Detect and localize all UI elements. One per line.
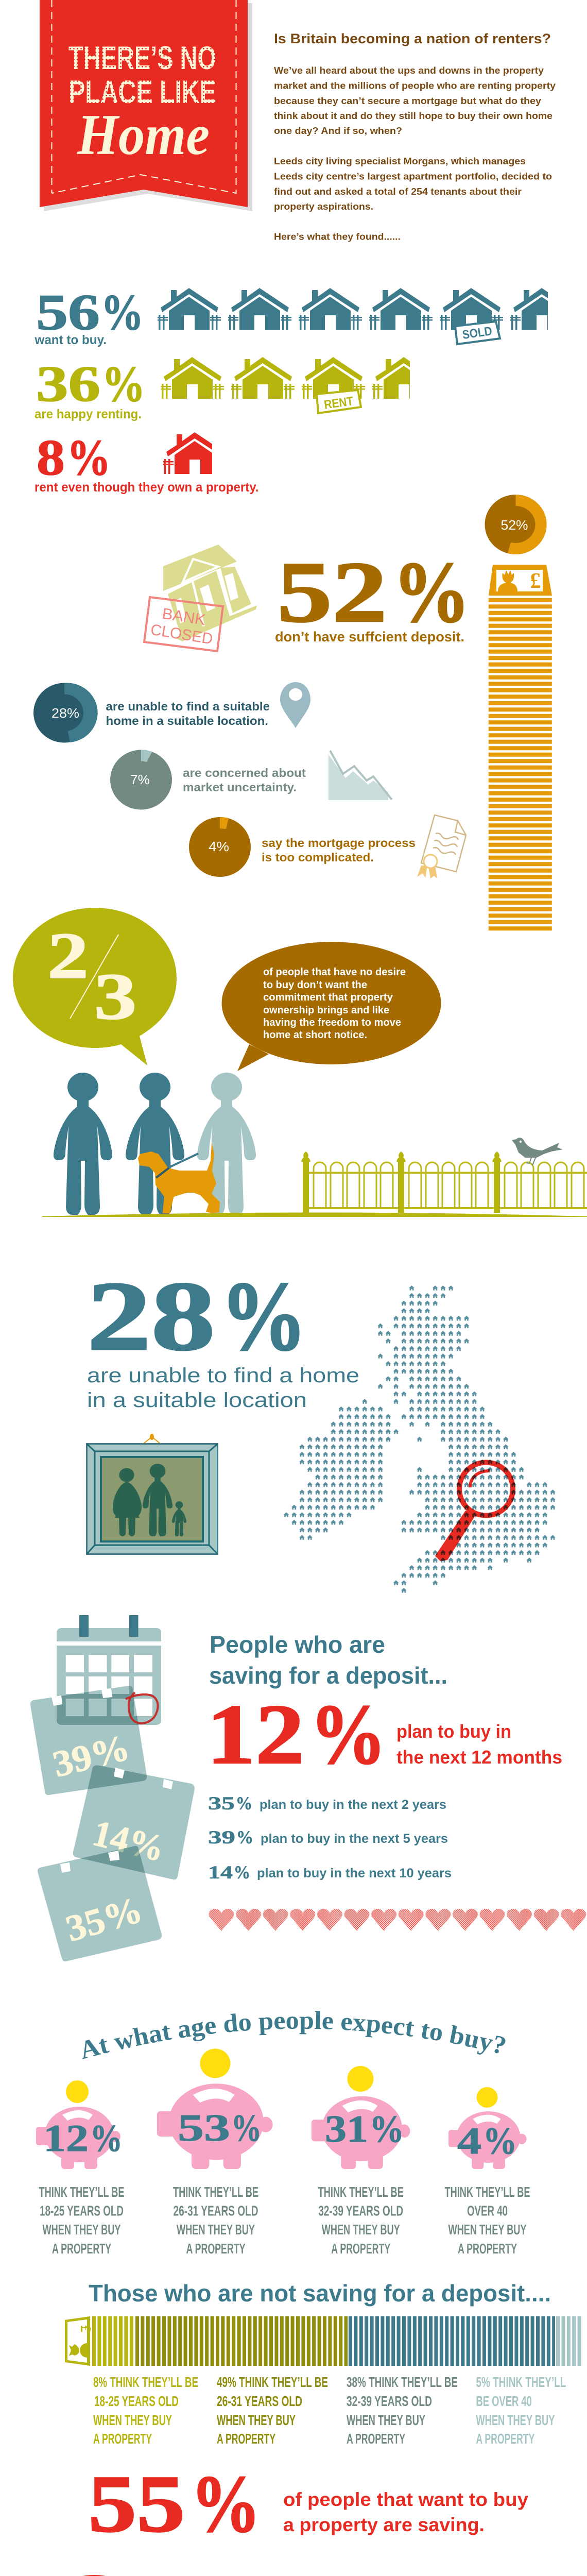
callout: two thirds bubble: 2 xyxy=(47,919,89,992)
title: Home script: Home xyxy=(77,103,210,167)
stat: 28% no suitable home: % xyxy=(220,1261,307,1371)
illustration: dog on lead xyxy=(138,1142,220,1213)
list: other saving plans: 14 xyxy=(208,1862,233,1883)
icon row: teal houses xyxy=(158,288,574,344)
labels: expected buying age: A PROPERTY xyxy=(331,2241,390,2257)
callout: no desire to buy bubble: ownership brings and like xyxy=(263,1005,389,1016)
labels: non-savers column 4: A PROPERTY xyxy=(476,2431,535,2447)
icon: certificate xyxy=(417,815,466,878)
decoration: cross-stitch hearts xyxy=(209,1909,587,1931)
piggy bank: 31%: 31 xyxy=(325,2108,368,2150)
icon: banknote end: £ xyxy=(77,2325,93,2332)
labels: expected buying age: 18-25 YEARS OLD xyxy=(40,2203,124,2218)
callout: no desire to buy bubble: home at short notice. xyxy=(263,1029,367,1041)
stat: 55% are saving: % xyxy=(191,2459,261,2549)
chart: 7% donut: 7% xyxy=(130,772,150,787)
stamp: bank closed: CLOSED xyxy=(149,621,214,648)
stat: 8% rent even though they own: % xyxy=(67,430,111,486)
piggy bank: 53%: 53 xyxy=(178,2107,230,2149)
illustration: framed family picture xyxy=(87,1434,217,1554)
title: There's no place like: PLACE LIKE xyxy=(68,74,216,110)
stat: 36% are happy renting: % xyxy=(102,356,145,412)
illustration: three people xyxy=(54,1073,256,1215)
illustration: ground xyxy=(42,1213,587,1217)
calendar page: 35% xyxy=(38,1846,162,1961)
labels: expected buying age: A PROPERTY xyxy=(52,2241,111,2257)
chart: 52% donut: 52% xyxy=(500,517,528,533)
text block: introduction: because they can’t secure a mortgage but what do they xyxy=(274,96,541,106)
heading: people saving for deposit xyxy=(209,1631,447,1689)
icon: rent sign: RENT xyxy=(323,394,354,412)
callout: no desire to buy bubble: to buy don’t want the xyxy=(263,979,367,991)
calendar page: 39%: 39% xyxy=(49,1726,133,1785)
labels: expected buying age: THINK THEY’LL BE xyxy=(318,2184,404,2200)
callout: no desire to buy bubble: commitment that property xyxy=(263,992,393,1003)
stat: 36% are happy renting xyxy=(34,356,436,421)
labels: non-savers column 2: 49% THINK THEY’LL BE xyxy=(217,2374,328,2390)
list: other saving plans: plan to buy in the next 2 years xyxy=(260,1798,446,1812)
labels: non-savers column 3: 38% THINK THEY’LL BE xyxy=(347,2374,458,2390)
piggy bank: 53%: % xyxy=(231,2107,262,2149)
list: other saving plans: % xyxy=(236,1827,253,1848)
illustration: iron fence xyxy=(301,1151,587,1213)
list: other saving plans: plan to buy in the next 10 years xyxy=(257,1866,452,1880)
text block: introduction: think about it and do they still hope to buy their own home xyxy=(274,111,553,121)
icon: closed bank xyxy=(163,545,257,641)
icon: banknote end xyxy=(65,2316,93,2366)
list: other saving plans: % xyxy=(236,1793,252,1814)
stat: 52% no deposit: % xyxy=(393,544,470,640)
icon: banknote stack: £ xyxy=(530,569,541,593)
labels: non-savers column 1: A PROPERTY xyxy=(93,2431,152,2447)
chart: 4% donut: 4% xyxy=(209,839,229,854)
text block: introduction: market and the millions of people who are renting property xyxy=(274,80,556,91)
labels: expected buying age: WHEN THEY BUY xyxy=(177,2222,255,2238)
labels: expected buying age: A PROPERTY xyxy=(458,2241,517,2257)
stat: 52% no deposit: 52 xyxy=(277,544,387,640)
heading: people saving for deposit: saving for a deposit... xyxy=(209,1662,447,1689)
icon: map pin xyxy=(280,682,310,728)
text: concerned about market uncertainty: market uncertainty. xyxy=(183,781,297,794)
labels: non-savers column 1: 18-25 YEARS OLD xyxy=(94,2393,179,2409)
labels: expected buying age: WHEN THEY BUY xyxy=(448,2222,527,2238)
icon: falling chart xyxy=(329,751,392,800)
text: unable to find suitable home xyxy=(106,700,270,727)
callout: two thirds bubble: 3 xyxy=(94,960,137,1033)
labels: expected buying age: THINK THEY’LL BE xyxy=(445,2184,530,2200)
text: mortgage process: is too complicated. xyxy=(262,851,374,864)
stat: 12% next 12 months: the next 12 months xyxy=(396,1747,562,1768)
mark: red circled date xyxy=(126,1692,158,1723)
labels: expected buying age: OVER 40 xyxy=(467,2203,508,2218)
stat: 55% are saving: 55 xyxy=(88,2459,185,2549)
piggy bank: 4%: 4 xyxy=(457,2120,481,2162)
labels: non-savers column 2: WHEN THEY BUY xyxy=(217,2412,296,2428)
stat: 55% are saving: a property are saving. xyxy=(283,2514,485,2535)
icon: red house xyxy=(163,432,212,474)
stat: 55% are saving: of people that want to buy xyxy=(283,2489,528,2510)
labels: non-savers column 4 xyxy=(476,2374,566,2447)
text: unable to find suitable home: home in a suitable location. xyxy=(106,714,268,727)
heading: at what age: At what age do people expect to buy? xyxy=(82,2011,506,2059)
text block: introduction: one day? And if so, when? xyxy=(274,126,402,136)
list: other saving plans: plan to buy in the next 5 years xyxy=(261,1832,448,1846)
text block: introduction: property aspirations. xyxy=(274,201,373,212)
text block: introduction: We’ve all heard about the ups and downs in the property xyxy=(274,65,544,76)
callout: two thirds bubble xyxy=(13,908,177,1065)
labels: non-savers column 2 xyxy=(217,2374,328,2447)
text: concerned about market uncertainty: are concerned about xyxy=(183,766,306,779)
chart: banknote stripe bar xyxy=(65,2316,582,2366)
stat: 8% rent even though they own xyxy=(34,430,258,495)
text block: introduction: Leeds city centre’s largest apartment portfolio, decided to xyxy=(274,171,552,181)
labels: expected buying age: 26-31 YEARS OLD xyxy=(173,2203,258,2218)
stat: 36% are happy renting: 36 xyxy=(36,356,100,412)
stat: 56% want to buy: % xyxy=(101,284,144,341)
stat: 28% no suitable home: are unable to find a home xyxy=(87,1364,359,1387)
labels: non-savers column 2: A PROPERTY xyxy=(217,2431,275,2447)
text: concerned about market uncertainty xyxy=(183,766,306,794)
labels: non-savers column 3 xyxy=(347,2374,458,2447)
heading: people saving for deposit: People who are xyxy=(210,1631,385,1658)
heading: intro question: Is Britain becoming a nation of renters? xyxy=(274,31,551,46)
chart: 28% donut: 28% xyxy=(51,705,79,721)
icon: sold sign xyxy=(455,321,500,344)
list: other saving plans xyxy=(208,1793,452,1883)
labels: non-savers column 2: 26-31 YEARS OLD xyxy=(217,2393,302,2409)
labels: expected buying age: 32-39 YEARS OLD xyxy=(318,2203,403,2218)
stat: 56% want to buy xyxy=(35,288,548,347)
icon: banknote stack xyxy=(489,565,552,931)
piggy bank: 12%: % xyxy=(90,2117,123,2160)
calendar page: 35%: 35% xyxy=(61,1889,147,1950)
labels: expected buying age: THINK THEY’LL BE xyxy=(39,2184,125,2200)
piggy bank: 12%: 12 xyxy=(43,2117,89,2160)
piggy bank: 31%: % xyxy=(370,2108,404,2150)
calendar page: 14%: 14% xyxy=(89,1812,169,1870)
labels: non-savers column 1: WHEN THEY BUY xyxy=(93,2412,172,2428)
stat: 8% rent even though they own: rent even though they own a property. xyxy=(34,480,258,495)
labels: expected buying age xyxy=(39,2184,530,2257)
calendar: pages and planner xyxy=(30,1615,195,1961)
stat: 8% rent even though they own: 8 xyxy=(37,430,65,486)
calendar page: 39% xyxy=(30,1686,147,1795)
callout: no desire to buy bubble: of people that have no desire xyxy=(263,967,406,978)
labels: non-savers column 1: 8% THINK THEY’LL BE xyxy=(93,2374,198,2390)
stamp: bank closed: BANK xyxy=(161,605,206,629)
marker: large red pin with 17% xyxy=(30,2575,158,2576)
text block: introduction: find out and asked a total of 254 tenants about their xyxy=(274,187,522,197)
stat: 12% next 12 months: % xyxy=(310,1687,386,1782)
piggy bank: 4% xyxy=(448,2087,527,2169)
title: There's no place like: THERE’S NO xyxy=(68,40,216,76)
labels: non-savers column 3: A PROPERTY xyxy=(347,2431,405,2447)
text block: introduction xyxy=(274,65,556,242)
piggy bank: 12% xyxy=(36,2080,123,2169)
icon: sold sign: SOLD xyxy=(461,324,493,342)
map: UK made of houses xyxy=(282,1284,557,1594)
stat: 36% are happy renting: are happy renting. xyxy=(34,407,142,421)
panel: title ribbon xyxy=(40,0,252,211)
stat: 55% are saving xyxy=(88,2459,528,2549)
icon: calendar xyxy=(57,1615,161,1725)
heading: not saving for a deposit: Those who are not saving for a deposit.... xyxy=(89,2280,551,2307)
stat: 28% no suitable home: 28 xyxy=(87,1261,215,1371)
text block: introduction: Here’s what they found...... xyxy=(274,232,401,242)
chart: 7% donut xyxy=(110,750,172,810)
stat: 28% no suitable home: in a suitable location xyxy=(87,1389,307,1412)
stat: 52% no deposit: don’t have suffcient deposit. xyxy=(275,629,464,645)
stat: 12% next 12 months: plan to buy in xyxy=(396,1721,511,1742)
labels: expected buying age: WHEN THEY BUY xyxy=(42,2222,121,2238)
stat: 52% no deposit xyxy=(275,544,470,645)
piggy bank: 53% xyxy=(157,2048,273,2169)
illustration: bird xyxy=(512,1138,563,1165)
stat: 12% next 12 months: 12 xyxy=(206,1687,304,1782)
labels: expected buying age: THINK THEY’LL BE xyxy=(173,2184,258,2200)
piggy bank: 31% xyxy=(312,2066,410,2169)
text: mortgage process: say the mortgage process xyxy=(262,836,416,850)
callout: no desire to buy bubble: having the freedom to move xyxy=(263,1017,401,1028)
labels: expected buying age: WHEN THEY BUY xyxy=(322,2222,400,2238)
stamp: bank closed xyxy=(144,597,223,651)
stat: 56% want to buy: 56 xyxy=(36,284,100,341)
calendar page: 14% xyxy=(73,1765,195,1879)
icon row: olive houses xyxy=(161,357,436,413)
stat: 28% no suitable home xyxy=(87,1261,359,1412)
list: other saving plans: % xyxy=(234,1862,250,1883)
list: other saving plans: 35 xyxy=(208,1793,235,1814)
icon: rent sign xyxy=(317,390,361,413)
list: other saving plans: 39 xyxy=(208,1827,235,1848)
labels: non-savers column 4: BE OVER 40 xyxy=(476,2393,532,2409)
labels: non-savers column 3: 32-39 YEARS OLD xyxy=(347,2393,432,2409)
text: mortgage process xyxy=(262,836,416,864)
chart: 28% donut xyxy=(33,683,98,743)
stat: 56% want to buy: want to buy. xyxy=(34,333,107,347)
callout: no desire to buy bubble xyxy=(221,942,441,1071)
labels: non-savers column 1 xyxy=(93,2374,198,2447)
text: unable to find suitable home: are unable to find a suitable xyxy=(106,700,270,713)
title: There's no place like xyxy=(68,40,216,110)
icon: magnifying glass xyxy=(435,1462,513,1561)
chart: 52% donut xyxy=(485,495,547,554)
labels: non-savers column 3: WHEN THEY BUY xyxy=(347,2412,425,2428)
text block: introduction: Leeds city living specialist Morgans, which manages xyxy=(274,156,526,166)
labels: expected buying age: A PROPERTY xyxy=(186,2241,246,2257)
piggy bank: 4%: % xyxy=(483,2120,517,2162)
stat: 12% next 12 months xyxy=(206,1687,562,1782)
chart: 4% donut xyxy=(189,817,251,877)
